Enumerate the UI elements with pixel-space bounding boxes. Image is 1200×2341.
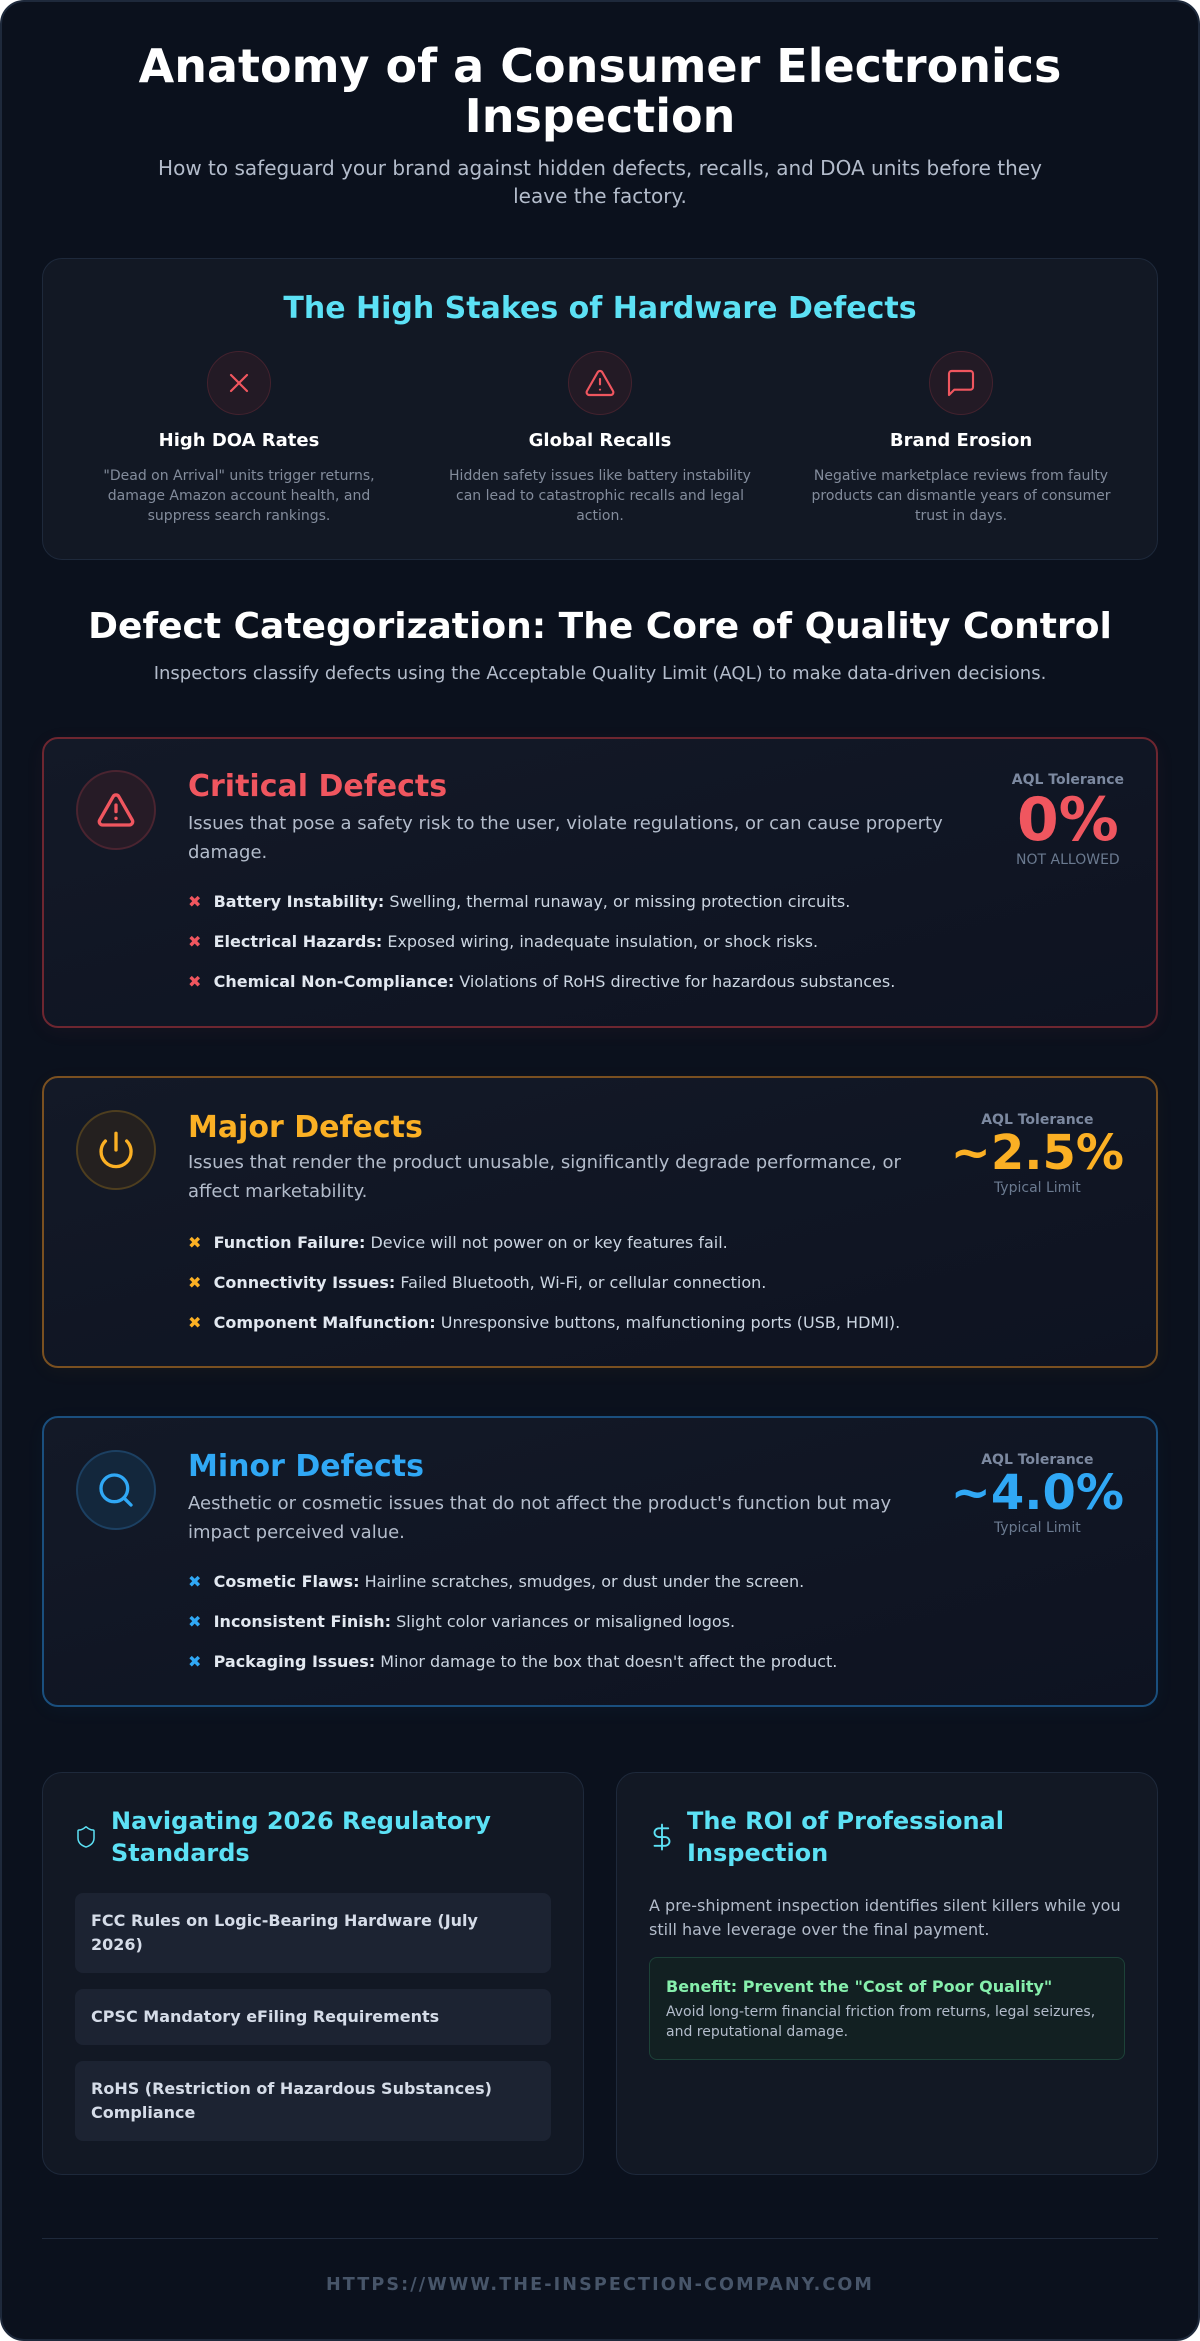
regulation item <box>75 2061 551 2141</box>
icon: power <box>76 1110 156 1190</box>
column text <box>103 468 375 524</box>
column text: action. <box>576 508 624 524</box>
panel: ROI of inspection <box>616 1772 1158 2175</box>
panel text: A pre-shipment inspection identifies silent killers while you <box>649 1896 1121 1915</box>
panel: high stakes of hardware defects <box>42 258 1158 560</box>
column: brand erosion <box>811 351 1111 524</box>
list item: ✖ <box>188 932 201 951</box>
column text: products can dismantle years of consumer <box>811 488 1111 504</box>
AQL tolerance stat <box>951 1452 1124 1536</box>
list item: Component Malfunction: Unresponsive buttons, malfunctioning ports (USB, HDMI). <box>214 1313 900 1332</box>
icon: x <box>207 351 271 415</box>
regulation item: 2026) <box>91 1935 143 1954</box>
column text: suppress search rankings. <box>148 508 330 524</box>
list item: ✖ <box>188 1652 201 1671</box>
regulation item: FCC Rules on Logic-Bearing Hardware (July <box>91 1911 478 1930</box>
card title: Minor Defects <box>188 1449 424 1484</box>
regulation item: RoHS (Restriction of Hazardous Substances) <box>91 2079 492 2098</box>
list item: Cosmetic Flaws: Hairline scratches, smudges, or dust under the screen. <box>214 1572 804 1591</box>
callout text <box>666 2004 1095 2040</box>
card description <box>188 1152 901 1202</box>
AQL tolerance stat: 0% <box>1017 785 1119 855</box>
list item: ✖ <box>188 1273 201 1292</box>
list item: Inconsistent Finish: Slight color variances or misaligned logos. <box>214 1612 735 1631</box>
column text <box>449 468 751 524</box>
defect list <box>188 1572 837 1671</box>
footer divider and URL <box>42 2238 1158 2329</box>
card description: Issues that pose a safety risk to the user, violate regulations, or can cause property <box>188 813 943 834</box>
regulation item <box>75 1989 551 2045</box>
panel heading: Standards <box>111 1839 250 1867</box>
icon: message square <box>929 351 993 415</box>
icon: warning triangle <box>76 770 156 850</box>
AQL tolerance stat: Typical Limit <box>994 1180 1081 1196</box>
panel: regulatory standards <box>42 1772 584 2175</box>
callout text: and reputational damage. <box>666 2024 848 2040</box>
column text: "Dead on Arrival" units trigger returns, <box>103 468 375 484</box>
column title: High DOA Rates <box>159 430 319 451</box>
card description <box>188 1493 891 1543</box>
card title: Critical Defects <box>188 769 447 804</box>
title <box>138 39 1061 143</box>
panel heading: The High Stakes of Hardware Defects <box>283 291 917 326</box>
list item: ✖ <box>188 1612 201 1631</box>
list item: ✖ <box>188 972 201 991</box>
subtitle <box>158 156 1042 208</box>
list item: Electrical Hazards: Exposed wiring, inadequate insulation, or shock risks. <box>214 932 818 951</box>
AQL tolerance stat: NOT ALLOWED <box>1016 852 1120 868</box>
defect list <box>188 892 895 991</box>
panel: critical defects <box>42 737 1158 1028</box>
callout title: Benefit: Prevent the "Cost of Poor Quality" <box>666 1977 1052 1996</box>
icon: shield <box>77 1826 95 1848</box>
panel text: still have leverage over the final payment. <box>649 1920 989 1939</box>
column: high DOA rates <box>103 351 375 524</box>
panel: major defects <box>42 1076 1158 1368</box>
card title: Major Defects <box>188 1110 423 1145</box>
column text <box>811 468 1111 524</box>
panel: minor defects <box>42 1416 1158 1707</box>
panel heading: The ROI of Professional <box>687 1807 1004 1835</box>
regulation item: CPSC Mandatory eFiling Requirements <box>91 2007 439 2026</box>
AQL tolerance stat: AQL Tolerance <box>981 1112 1093 1128</box>
panel heading <box>687 1807 1004 1867</box>
column title: Brand Erosion <box>890 430 1032 451</box>
title: Inspection <box>465 89 735 143</box>
column text: Hidden safety issues like battery instability <box>449 468 751 484</box>
section heading: Defect Categorization: The Core of Quality Control <box>88 606 1112 647</box>
list item: ✖ <box>188 1572 201 1591</box>
icon: search <box>76 1450 156 1530</box>
AQL tolerance stat: ~4.0% <box>951 1465 1124 1521</box>
card description: damage. <box>188 842 267 863</box>
callout: benefit <box>649 1957 1125 2060</box>
list item: Connectivity Issues: Failed Bluetooth, Wi-Fi, or cellular connection. <box>214 1273 766 1292</box>
list item: Packaging Issues: Minor damage to the box that doesn't affect the product. <box>214 1652 837 1671</box>
column: global recalls <box>449 351 751 524</box>
subtitle: How to safeguard your brand against hidden defects, recalls, and DOA units before they <box>158 156 1042 180</box>
AQL tolerance stat: AQL Tolerance <box>1012 772 1124 788</box>
card description <box>188 813 943 863</box>
regulation item <box>75 1893 551 1973</box>
card description: Issues that render the product unusable, significantly degrade performance, or <box>188 1152 901 1173</box>
panel heading: Inspection <box>687 1839 828 1867</box>
icon: warning triangle <box>568 351 632 415</box>
footer URL: HTTPS://WWW.THE-INSPECTION-COMPANY.COM <box>326 2275 874 2295</box>
column text: can lead to catastrophic recalls and legal <box>456 488 744 504</box>
list item: Function Failure: Device will not power on or key features fail. <box>214 1233 728 1252</box>
AQL tolerance stat: Typical Limit <box>994 1520 1081 1536</box>
section subtitle: Inspectors classify defects using the Acceptable Quality Limit (AQL) to make data-driven decisions. <box>154 663 1046 684</box>
column text: trust in days. <box>915 508 1007 524</box>
panel text <box>649 1896 1121 1939</box>
column text: damage Amazon account health, and <box>108 488 370 504</box>
list item: ✖ <box>188 1313 201 1332</box>
column text: Negative marketplace reviews from faulty <box>814 468 1108 484</box>
card description: affect marketability. <box>188 1181 367 1202</box>
card description: impact perceived value. <box>188 1522 405 1543</box>
list item: ✖ <box>188 892 201 911</box>
list item: Battery Instability: Swelling, thermal runaway, or missing protection circuits. <box>214 892 850 911</box>
column title: Global Recalls <box>529 430 671 451</box>
AQL tolerance stat <box>1012 772 1124 868</box>
list item: Chemical Non-Compliance: Violations of RoHS directive for hazardous substances. <box>214 972 895 991</box>
subtitle: leave the factory. <box>513 184 687 208</box>
regulation item: Compliance <box>91 2103 195 2122</box>
card description: Aesthetic or cosmetic issues that do not affect the product's function but may <box>188 1493 891 1514</box>
AQL tolerance stat: ~2.5% <box>951 1125 1124 1181</box>
list item: ✖ <box>188 1233 201 1252</box>
defect list <box>188 1233 900 1332</box>
AQL tolerance stat <box>951 1112 1124 1196</box>
panel heading <box>111 1807 491 1867</box>
panel heading: Navigating 2026 Regulatory <box>111 1807 491 1835</box>
callout text: Avoid long-term financial friction from returns, legal seizures, <box>666 2004 1095 2020</box>
AQL tolerance stat: AQL Tolerance <box>981 1452 1093 1468</box>
title: Anatomy of a Consumer Electronics <box>139 39 1061 93</box>
icon: dollar sign <box>654 1824 670 1850</box>
